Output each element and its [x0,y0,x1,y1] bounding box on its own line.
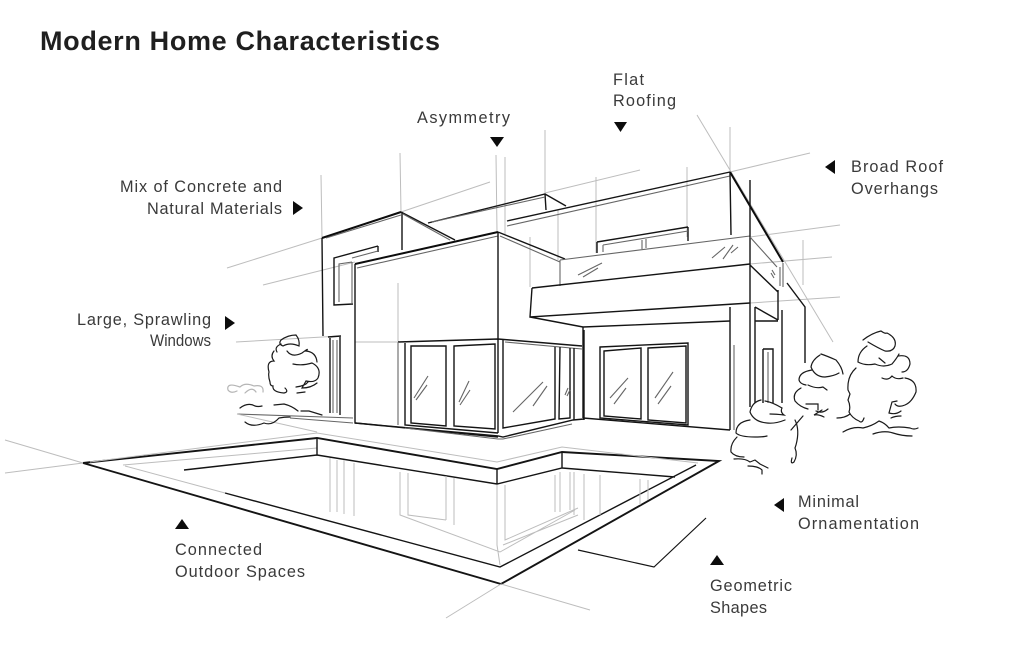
corner glazing [355,330,584,439]
house line drawing [227,115,840,439]
label: geometric shapes: Shapes [710,599,767,617]
label: asymmetry: Asymmetry [417,109,511,127]
label: connected outdoor spaces: Connected [175,541,262,559]
label: large sprawling windows [77,311,235,350]
label: mix of concrete and natural materials [120,178,303,218]
label: geometric shapes: Geometric [710,577,792,595]
bush: right large [843,331,918,436]
geometric ground shape [578,518,706,567]
label: flat roofing: Roofing [613,92,676,110]
left block [322,212,455,336]
label: geometric shapes [710,555,792,617]
right side columns [730,180,783,430]
left porch [237,336,353,423]
label: connected outdoor spaces [175,519,305,581]
pool extension lines [5,440,590,618]
bush: middle [791,354,850,430]
lower right window [583,343,730,430]
pool inner edge [184,438,696,567]
small upper window [334,246,378,305]
bush: left [228,335,322,425]
label: minimal ornamentation [774,493,919,533]
label: connected outdoor spaces: Outdoor Spaces [175,563,305,581]
label: large sprawling windows: Large, Sprawling [77,311,211,329]
label: broad roof overhangs: Overhangs [851,180,938,198]
label: broad roof overhangs: Broad Roof [851,158,943,176]
label: broad roof overhangs [825,158,943,198]
label: asymmetry [417,109,511,147]
pool [5,414,719,618]
water reflections [330,458,648,565]
overhang slab [530,264,750,418]
title: Modern Home Characteristics [40,26,440,56]
label: mix of concrete and natural materials: Natural Materials [147,200,282,218]
upper volume and roof [507,172,805,363]
label: large sprawling windows: Windows [150,332,211,350]
balcony glints [578,245,738,277]
pool outer edge [83,438,719,584]
back roof [428,194,566,223]
main block [355,232,565,437]
pool coping light lines [90,414,698,465]
label: mix of concrete and natural materials: Mix of Concrete and [120,178,282,196]
label: minimal ornamentation: Minimal [798,493,859,511]
label: flat roofing: Flat [613,71,644,89]
construction lines [227,115,840,342]
side door [763,349,773,403]
upper balcony window [597,227,688,253]
bush: low front [731,400,798,474]
label: minimal ornamentation: Ornamentation [798,515,919,533]
label: flat roofing [613,71,676,132]
